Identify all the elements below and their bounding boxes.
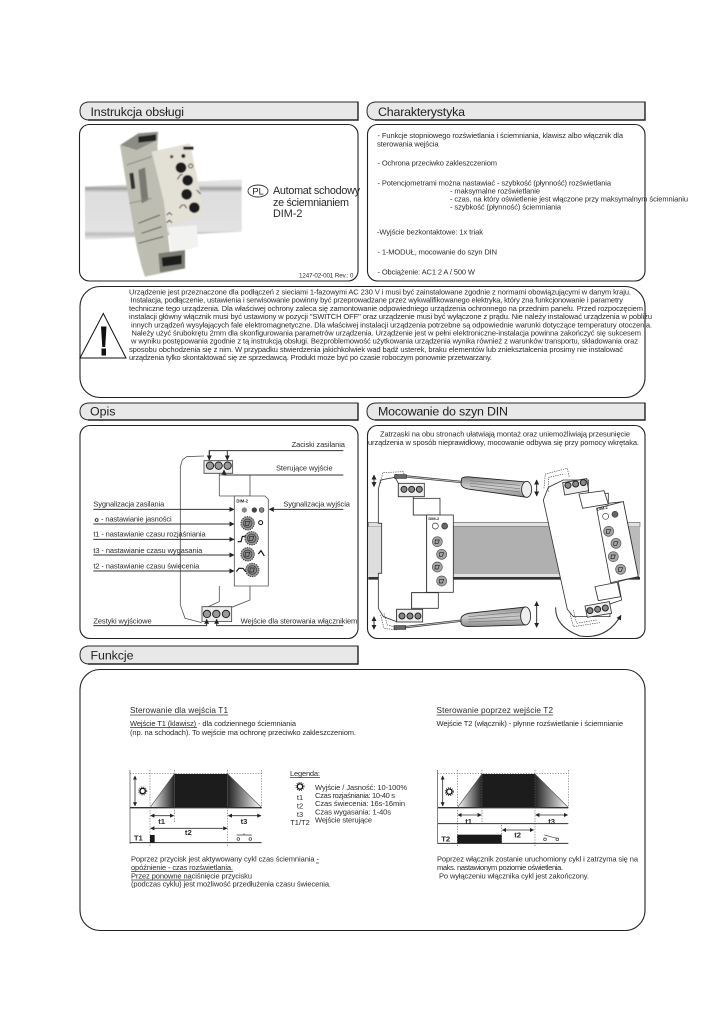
- feature list: - czas, na który oświetlenie jest włączone przy maksymalnym ściemnianiu: [450, 194, 688, 204]
- T1 explanation: Przez ponowne naciśnięcie przycisku: [131, 872, 252, 880]
- language badge: [248, 185, 268, 198]
- T1 explanation: [131, 854, 331, 888]
- header: Charakterystyka: [367, 102, 645, 120]
- screwdriver bottom: [394, 607, 531, 629]
- warning text: w wyniku postępowania zgodnie z tą instrukcją obsługi. Bezproblemowość użytkowania urządzenia wynika również z warunków transportu, składowania oraz: [130, 337, 638, 346]
- legend: Legenda:: [290, 769, 320, 778]
- mounting text: Zatrzaski na obu stronach ułatwiają montaż oraz uniemożliwiają przesunięcie: [380, 430, 630, 438]
- panel: functions: [80, 670, 645, 930]
- header: Instrukcja obsługi: [80, 102, 358, 120]
- mounting illustration: [368, 468, 640, 637]
- T1 description: Wejście T1 (klawisz) - dla codziennego ściemniania: [130, 719, 297, 728]
- header: Opis: [80, 403, 358, 420]
- chart: T2 timing: T2: [441, 834, 450, 843]
- label: brightness: [93, 515, 234, 524]
- feature list: - 1-MODUŁ, mocowanie do szyn DIN: [378, 248, 497, 256]
- label: output contacts: [93, 616, 207, 626]
- header: Instrukcja obsługi: Instrukcja obsługi: [90, 105, 184, 119]
- warning text: urządzenia tylko skontaktować się ze sprzedawcą. Produkt może być po czasie roboczym ponownie przetwarzany.: [129, 353, 492, 362]
- legend: t1: [297, 793, 303, 802]
- mounting text: [368, 430, 639, 447]
- header: Mocowanie do szyn DIN: Mocowanie do szyn DIN: [378, 404, 508, 418]
- mounting text: urządzenia w sposób nieprawidłowy, mocowanie odbywa się przy pomocy wkrętaka.: [368, 438, 639, 447]
- warning text: innych urządzeń wysyłających fale elektromagnetyczne. Dla właściwej instalacji urządzenia potrzebne są odpowiednie warunki dotyczące temperatury otoczenia.: [131, 320, 652, 329]
- left device: DIM-2: [428, 516, 440, 521]
- warning text: sposobu obchodzenia się z nim. W przypadku stwierdzenia jakichkolwiek wad bądź usterek, braku elementów lub zniekształcenia prosimy nie instalować: [129, 345, 623, 354]
- legend: Czas wygasania: 1-40s: [315, 808, 391, 816]
- product photo: [85, 132, 242, 277]
- warning text: Należy użyć śrubokrętu 2mm dla skonfigurowania parametrów urządzenia. Urządzenie jest w pełni elektroniczne-instalacja powinna zakończyć się sukcesem: [132, 328, 641, 338]
- legend: Wyjście / Jasność: 10-100%: [315, 783, 407, 792]
- feature list: - Potencjometrami można nastawiać - szybkość (płynność) rozświetlania: [378, 178, 612, 188]
- legend: Czas świecenia: 16s-16min: [315, 799, 405, 808]
- chart: T1 timing: [130, 770, 262, 847]
- T2 description: [436, 706, 623, 728]
- screwdriver top: [395, 475, 532, 497]
- legend: t3: [297, 810, 303, 819]
- feature list: - Ochrona przeciwko zakleszczeniom: [378, 158, 497, 168]
- warning text: [129, 288, 652, 362]
- feature list: -Wyjście bezkontaktowe: 1x triak: [377, 228, 483, 236]
- label: output contacts: Zestyki wyjściowe: [93, 616, 152, 625]
- warning text: techniczne tego urządzenia. Dla właściwej ochrony zaleca się zamontowanie odpowiedniego urządzenia ochronnego na przednim panelu. Przed rozpoczęciem: [129, 304, 643, 313]
- header: Mocowanie do szyn DIN: [367, 403, 645, 420]
- header: Charakterystyka: Charakterystyka: [378, 105, 465, 119]
- panel: description diagram: [80, 426, 358, 638]
- legend: Wejście sterujące: [315, 816, 372, 824]
- device outline: DIM-2: [236, 499, 249, 504]
- chart: T1 timing: t2: [185, 828, 192, 837]
- T1 description: (np. na schodach). To wejście ma ochronę przeciwko zakleszczeniom.: [130, 728, 356, 737]
- product name: [273, 185, 361, 220]
- icon: warning triangle: [80, 314, 126, 358]
- left device: [378, 472, 453, 630]
- chart: T2 timing: t1: [465, 817, 473, 826]
- feature list: [377, 131, 688, 276]
- label: t1: t1 - nastawianie czasu rozjaśniania: [93, 530, 206, 539]
- T1 explanation: (podczas cyklu) jest możliwość przedłużenia czasu świecenia.: [131, 880, 331, 888]
- T1 description: [130, 706, 356, 737]
- device outline: [180, 456, 268, 623]
- header: Funkcje: [80, 646, 358, 664]
- label: brightness: - nastawianie jasności: [101, 515, 172, 524]
- T2 description: Sterowanie poprzez wejście T2: [436, 706, 553, 715]
- T2 explanation: Po wyłączeniu włącznika cykl jest zakończony.: [439, 872, 589, 880]
- feature list: - Funkcje stopniowego rozświetlania i ściemniania, klawisz albo włącznik dla: [378, 131, 624, 140]
- T1 explanation: opóźnienie - czas rozświetlania.: [131, 863, 233, 872]
- T2 description: Wejście T2 (włącznik) - płynne rozświetlanie i ściemnianie: [436, 719, 623, 728]
- product name: ze ściemnianiem: [273, 197, 349, 209]
- chart: T2 timing: t3: [548, 817, 555, 826]
- legend: Czas rozjaśniania: 10-40 s: [315, 791, 395, 800]
- label: t3: t3 - nastawianie czasu wygasania: [93, 546, 203, 555]
- panel: characteristics: [368, 124, 688, 281]
- legend: [290, 769, 407, 827]
- panel: product: [80, 124, 361, 281]
- movement arrows: [374, 475, 621, 637]
- label: output signal: Sygnalizacja wyjścia: [283, 500, 351, 509]
- warning text: Urządzenie jest przeznaczone dla podłączeń z sieciami 1-fazowymi AC 230 V i musi być zainstalowane zgodnie z normami obowiązującymi w danym kraju.: [129, 288, 631, 296]
- panel: safety warning: [80, 286, 652, 398]
- label: t2: t2 - nastawianie czasu świecenia: [93, 561, 200, 570]
- T2 explanation: Poprzez włącznik zostanie uruchomiony cykl i zatrzyma się na: [437, 854, 639, 864]
- panel: DIN rail mounting: [368, 426, 645, 638]
- header: Opis: Opis: [90, 404, 116, 418]
- feature list: - szybkość (płynność) ściemniania: [450, 202, 562, 212]
- feature list: - Obciążenie: AC1 2 A / 500 W: [378, 268, 476, 276]
- DIN rail: [368, 522, 640, 580]
- legend: t2: [297, 802, 303, 810]
- document revision: 1247-02-001 Rev.: 0: [299, 272, 354, 280]
- feature list: - maksymalne rozświetlanie: [450, 186, 540, 196]
- chart: T1 timing: t3: [241, 817, 247, 826]
- label: power signal: Sygnalizacja zasilania: [93, 500, 165, 509]
- label: control output: Sterujące wyjście: [276, 464, 333, 473]
- T2 explanation: [437, 854, 639, 880]
- warning text: instalacji główny włącznik musi być ustawiony w pozycji "SWITCH OFF" oraz urządzenie musi być wyłączone z prądu. Nie należy instalować urządzenia w pobliżu: [129, 312, 652, 321]
- chart: T2 timing: [438, 770, 568, 847]
- right device tilted: DIM-2: [597, 505, 609, 512]
- chart: T1 timing: t1: [158, 817, 166, 826]
- T2 explanation: maks. nastawionym poziomie oświetlenia.: [437, 863, 563, 872]
- feature list: sterowania wejścia: [377, 140, 439, 148]
- device wiring diagram: [93, 440, 357, 626]
- chart: T1 timing: T1: [134, 834, 144, 843]
- T1 explanation: Poprzez przycisk jest aktywowany cykl czas ściemniania -: [131, 854, 320, 864]
- T1 description: Sterowanie dla wejścia T1: [130, 706, 228, 715]
- label: power terminals: Zaciski zasilania: [292, 440, 346, 449]
- label: power terminals: [209, 440, 346, 460]
- product name: Automat schodowy: [273, 185, 361, 197]
- chart: T2 timing: t2: [514, 830, 521, 839]
- warning text: Instalacja, podłączenie, ustawienia i serwisowanie powinny być przeprowadzane przez wykwalifikowanego elektryka, który zna funkcjonowanie i parametry: [130, 296, 623, 305]
- header: Funkcje: Funkcje: [90, 648, 134, 662]
- label: control output: [224, 464, 343, 475]
- label: switch input: Wejście dla sterowania włącznikiem: [241, 616, 357, 625]
- right device tilted: [543, 468, 638, 627]
- language badge: PL: [252, 186, 264, 198]
- legend: T1/T2: [290, 818, 310, 827]
- product name: DIM-2: [273, 208, 302, 220]
